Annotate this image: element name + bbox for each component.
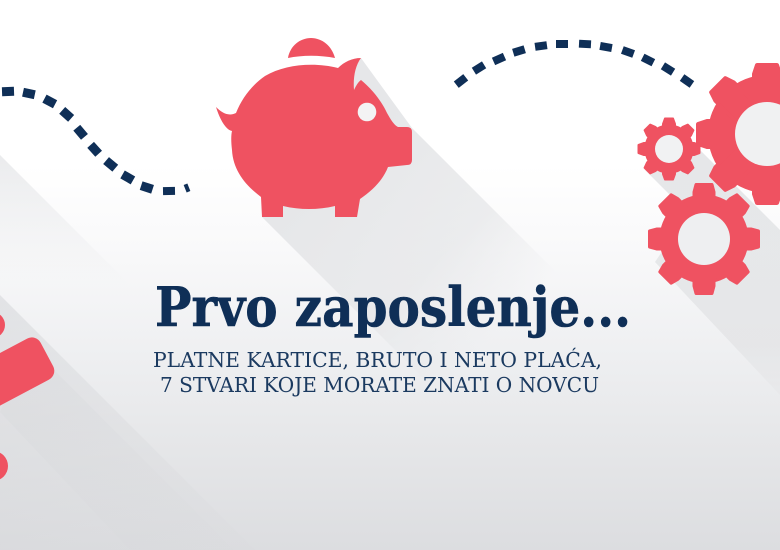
coin [288,38,335,58]
icon: small gear [638,118,700,180]
icon: piggy bank [216,38,412,217]
dashed curve: top right [454,40,694,88]
pig body [216,58,412,217]
pig eye [358,103,376,121]
subtitle: 7 STVARI KOJE MORATE ZNATI O NOVCU [160,373,599,397]
title: Prvo zaposlenje... [155,275,631,339]
icon: medium gear [650,184,758,294]
subtitle [153,347,602,397]
subtitle: PLATNE KARTICE, BRUTO I NETO PLAĆA, [153,347,602,372]
icon: large gear [698,65,780,203]
icon: cropped card shapes at left edge [0,312,58,481]
dashed curve: left [2,87,190,195]
